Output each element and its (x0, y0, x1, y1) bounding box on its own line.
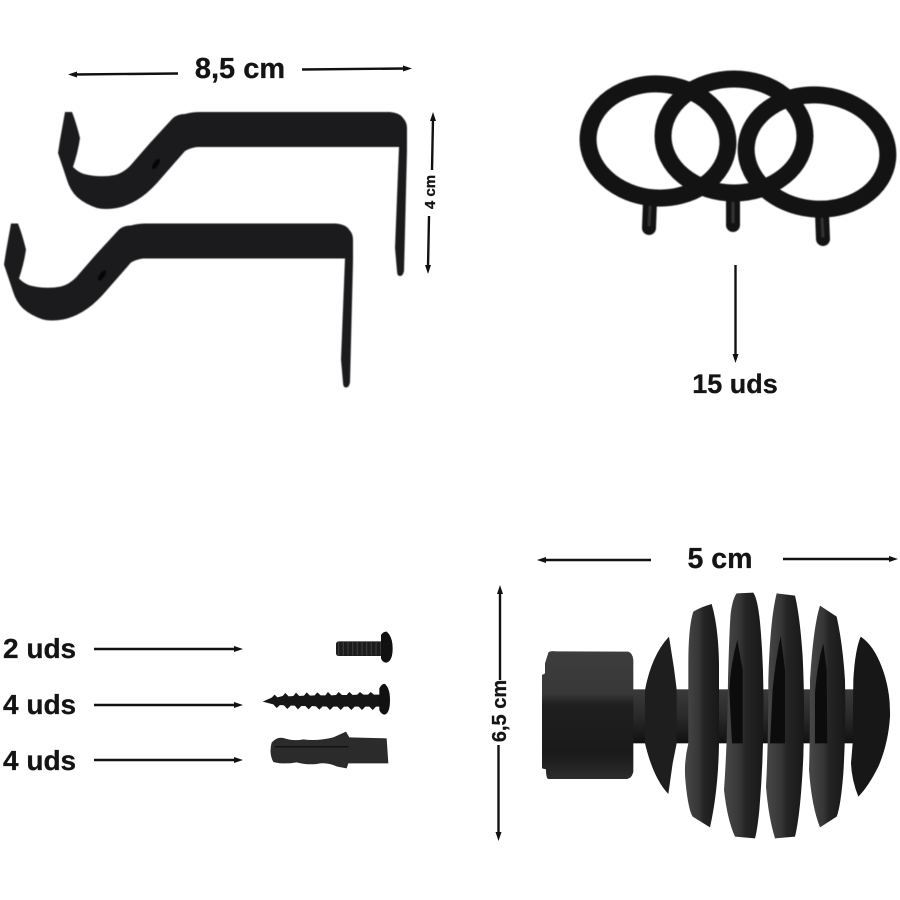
arrow to wall anchor (94, 757, 243, 763)
finial slot shadows (729, 636, 827, 743)
dimension label: 6,5 cm: 6,5 cm (489, 680, 511, 742)
finial cone (645, 637, 677, 794)
width arrow left (537, 557, 651, 563)
arrow to wood screw (94, 702, 243, 708)
finial disc 3 (766, 593, 804, 838)
quantity label: 4 uds screws: 4 uds (3, 689, 76, 720)
finial disc 4 (809, 606, 845, 827)
icon: machine screw (336, 632, 393, 663)
finial dome (851, 637, 890, 797)
icon: lower bracket (4, 224, 353, 388)
panel: screws and anchors (3, 632, 393, 776)
icon: wall anchor (270, 732, 388, 768)
icon: upper bracket (58, 112, 407, 276)
finial cylinder (542, 651, 633, 779)
quantity label: 2 uds: 2 uds (3, 633, 76, 664)
height arrow down (425, 216, 431, 274)
finial disc 2 (724, 593, 763, 838)
height arrow up (430, 112, 436, 170)
panel: curtain rings (584, 79, 894, 399)
width arrow right (783, 556, 898, 562)
arrow to machine screw (94, 646, 243, 652)
dimension label: 8,5 cm: 8,5 cm (195, 53, 285, 85)
quantity label: 4 uds anchors: 4 uds (3, 745, 76, 776)
dimension label: 5 cm: 5 cm (688, 543, 752, 575)
icon: wood screw (263, 684, 390, 715)
finial rod (632, 689, 858, 743)
height arrow down (496, 745, 502, 841)
quantity arrow (732, 265, 738, 363)
icon: ribbed finial (542, 593, 890, 838)
dimension label: 4 cm: 4 cm (422, 175, 439, 209)
quantity label: 15 uds: 15 uds (692, 369, 778, 399)
finial disc 1 (685, 604, 719, 827)
icon: three rings (584, 79, 894, 239)
panel: finial (489, 543, 898, 841)
height arrow up (497, 585, 503, 680)
panel: wall brackets (4, 53, 439, 388)
width arrow right (302, 66, 412, 72)
width arrow left (68, 72, 178, 78)
